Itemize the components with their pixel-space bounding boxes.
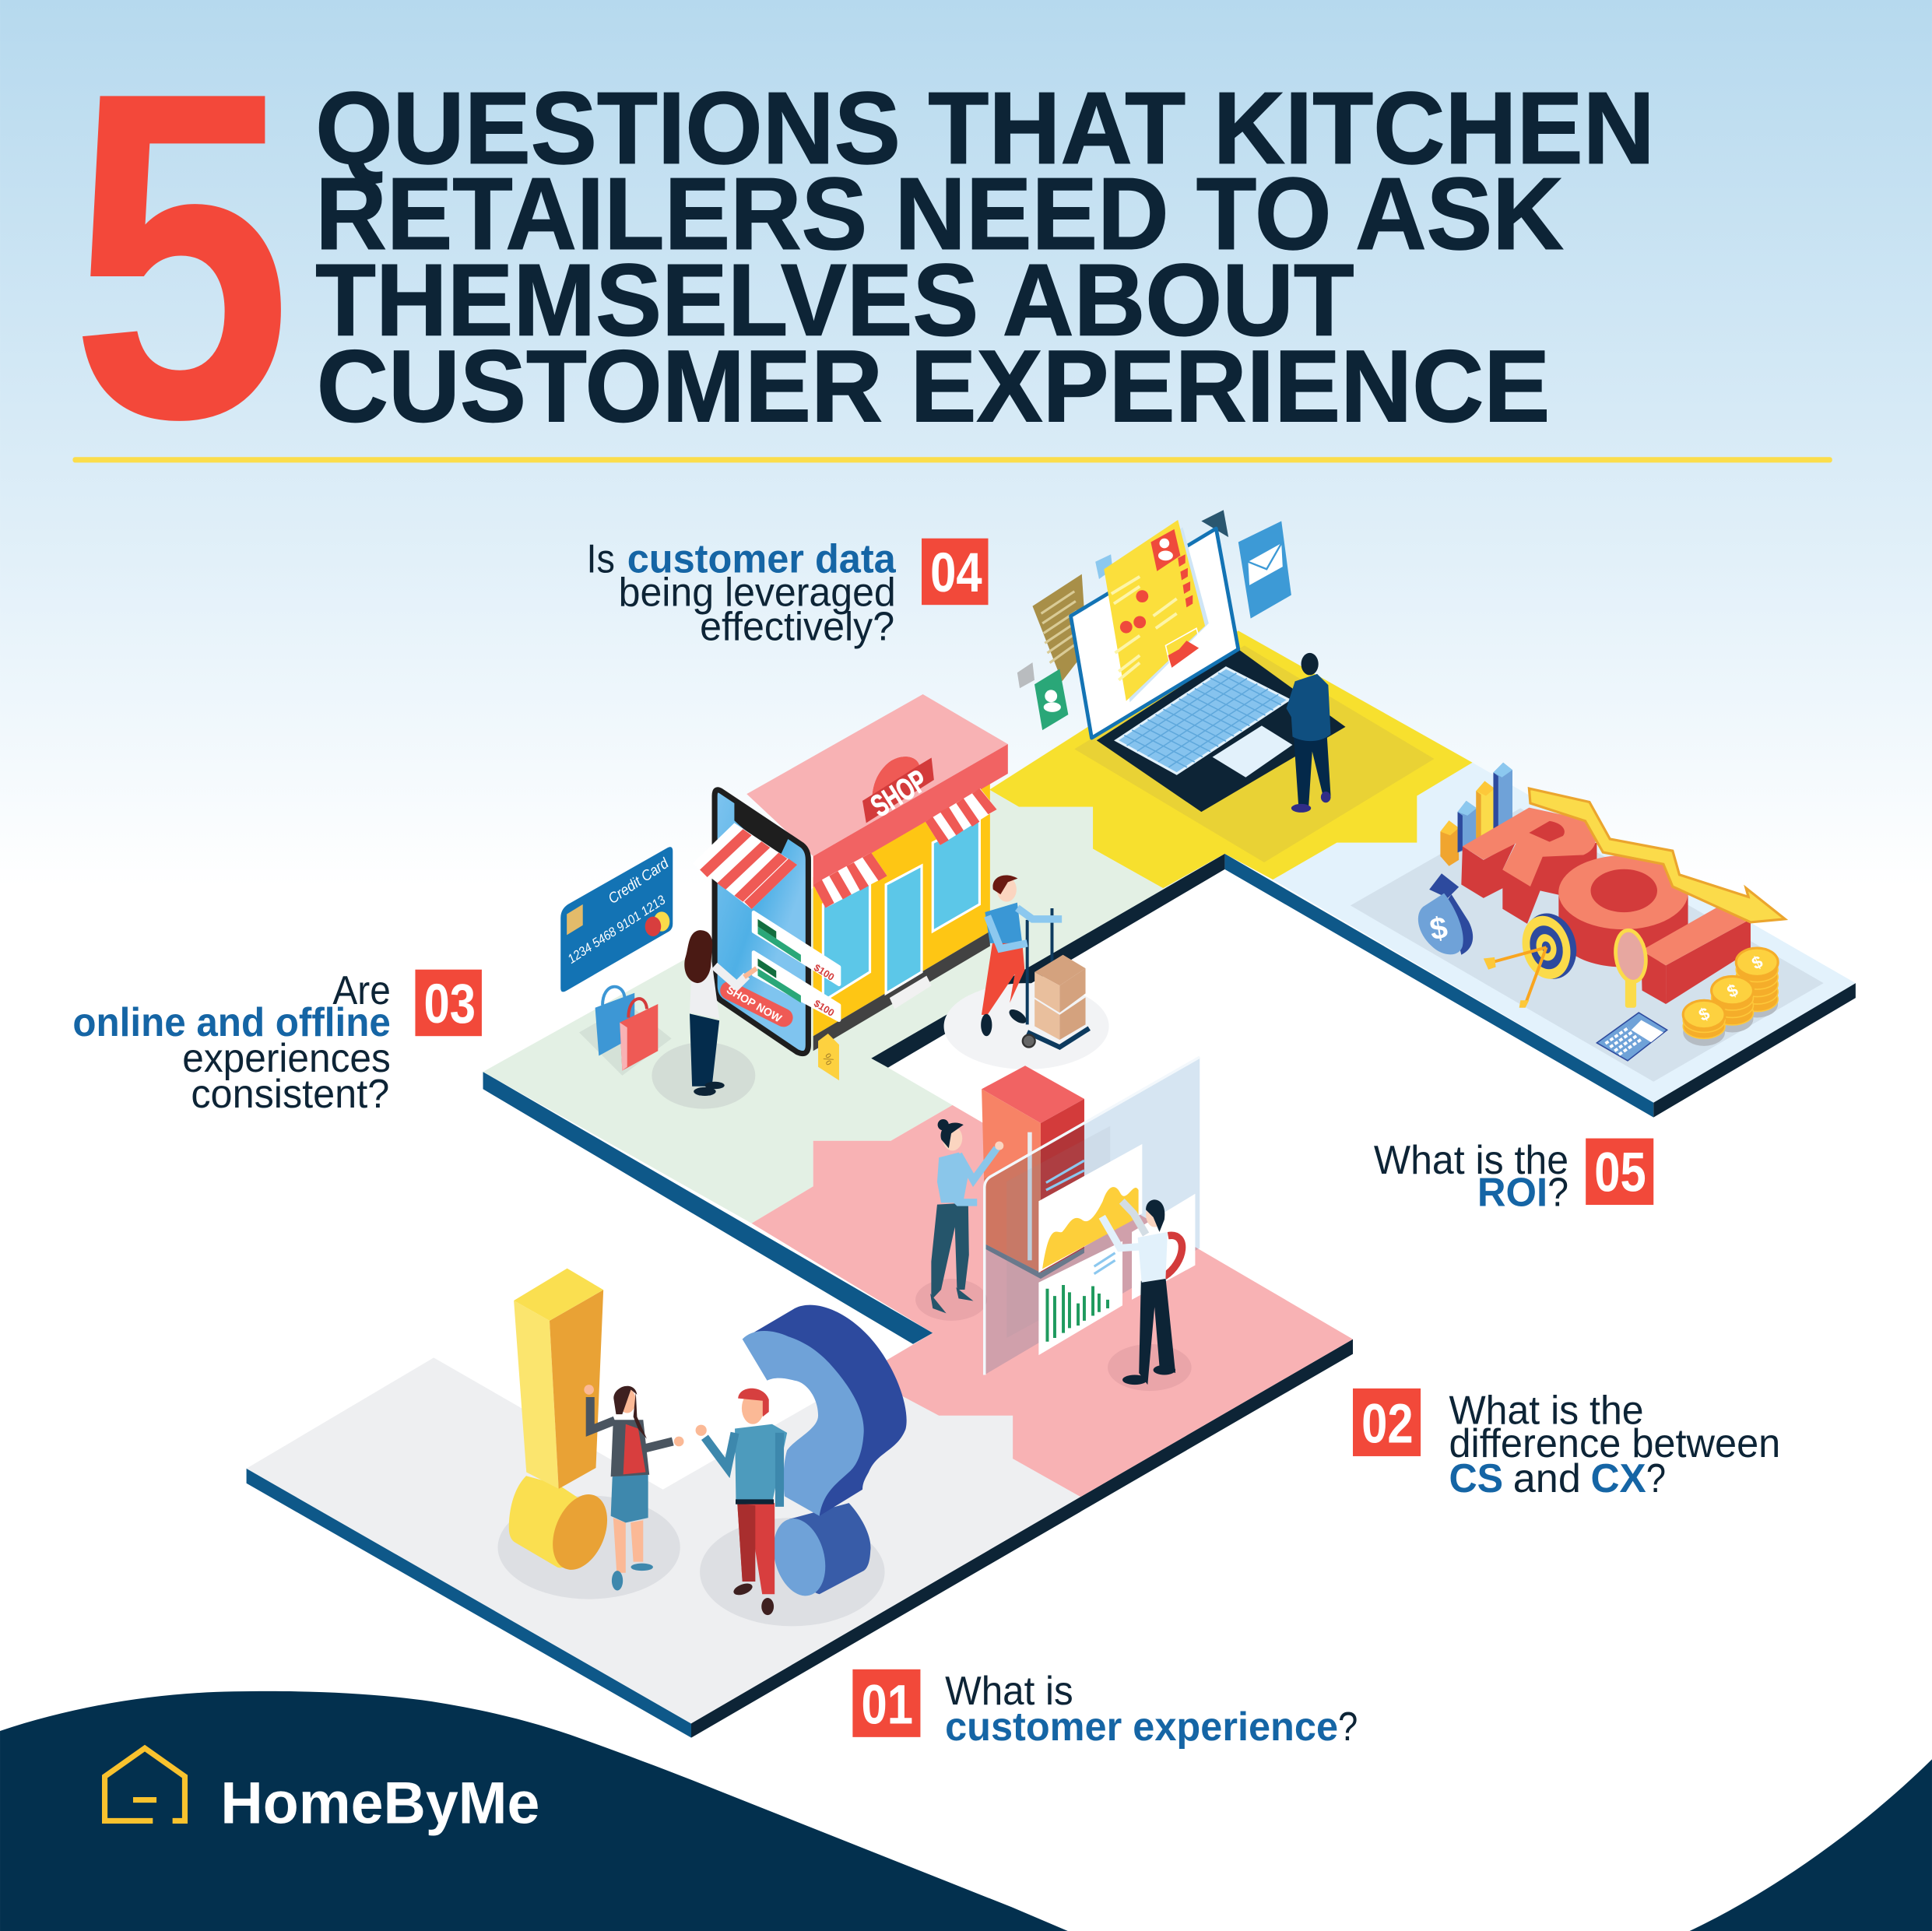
ROI letters [1461, 808, 1751, 1004]
icon: refrigerator [982, 1066, 1084, 1279]
awnings [813, 788, 997, 908]
person: man at laptop [1287, 653, 1331, 813]
question 05 [1374, 1138, 1653, 1216]
title divider line [72, 457, 1832, 462]
question 03 [72, 968, 482, 1117]
question 01 [852, 1669, 1358, 1750]
icon: coin stacks [1683, 948, 1778, 1046]
question text 04: effectively? [700, 605, 894, 650]
icon: coin stacks: $ [1724, 980, 1741, 1002]
product cards: $100 [812, 998, 836, 1019]
question text 02: What is the [1449, 1388, 1644, 1433]
bar chart card [1038, 1241, 1122, 1355]
panel 01: customer experience platform [247, 1269, 1080, 1738]
big number 5: 5 [70, 0, 292, 515]
question text 02: CX [1591, 1456, 1646, 1501]
title [315, 71, 1655, 443]
question text 03: Are [332, 968, 391, 1013]
bar chart icon [1440, 763, 1512, 866]
icon: money bag: $ [1428, 911, 1450, 947]
panel 05: ROI platform [1224, 763, 1856, 1118]
shop now button: SHOP NOW [724, 984, 784, 1026]
person: man in red trousers [696, 1389, 787, 1615]
footer wave right [1688, 1759, 1932, 1931]
icon: coin stacks: $ [1749, 951, 1766, 974]
icon: shop [746, 694, 1008, 1051]
question text 05: ROI [1477, 1171, 1547, 1216]
icon: calculator [1597, 1013, 1667, 1061]
icon: shopping bags [579, 987, 672, 1076]
question text 01: ? [1338, 1705, 1358, 1750]
number badge 03: 03 [424, 974, 476, 1035]
person: man in white shirt [1102, 1199, 1175, 1385]
brand name: HomeByMe [220, 1771, 539, 1837]
question text 03 [72, 968, 391, 1117]
icon: credit card: 1234 5468 9101 1213 [565, 892, 669, 967]
title: CUSTOMER EXPERIENCE [317, 328, 1550, 443]
person: woman in blue [930, 1119, 1003, 1313]
icon: credit card: Credit Card [606, 855, 673, 908]
shadow ellipses [915, 1279, 987, 1321]
number badge 04: 04 [930, 542, 982, 604]
question 02 [1353, 1388, 1780, 1501]
product cards: $100 [812, 962, 836, 983]
question text 03: experiences [182, 1036, 391, 1081]
footer wave left [0, 1691, 1070, 1931]
glass panel [985, 1057, 1200, 1375]
question text 05 [1374, 1138, 1568, 1216]
icon: floating documents [1017, 510, 1291, 730]
question text 02: CS [1449, 1456, 1503, 1501]
product cards [753, 912, 839, 1020]
person: shopper [684, 930, 757, 1096]
shop sign [862, 757, 934, 823]
question text 05: What is the [1374, 1138, 1568, 1183]
panel 04: customer data platform [871, 510, 1473, 1068]
number badge 02: 02 [1361, 1394, 1414, 1455]
question text 02: ? [1646, 1456, 1666, 1501]
icon: price tag: % [820, 1052, 836, 1068]
logo [105, 1748, 539, 1837]
question text 04 [586, 537, 897, 650]
question text 05: ? [1547, 1171, 1568, 1216]
question text 04: Is [586, 537, 615, 582]
icon: price tag [818, 1034, 839, 1080]
person: woman with jacket [584, 1385, 684, 1590]
icon: laptop [1071, 520, 1346, 812]
person: courier with hand truck [981, 875, 1089, 1047]
question text 02: and [1513, 1456, 1581, 1501]
phone awning [693, 823, 797, 909]
icon: house [105, 1748, 184, 1820]
question text 03: consistent? [191, 1072, 389, 1117]
panel 03: online and offline platform [483, 694, 1224, 1344]
title: QUESTIONS THAT KITCHEN [315, 71, 1655, 185]
icon: money bag [1418, 873, 1473, 955]
shadow ellipse under courier [944, 983, 1109, 1069]
question text 04: customer data [627, 537, 897, 582]
question text 01: What is [945, 1669, 1073, 1714]
number badge 01: 01 [861, 1674, 913, 1736]
panel 02: CS vs CX platform [691, 1057, 1353, 1737]
icon: coin stacks: $ [1695, 1003, 1713, 1025]
question 04 [586, 537, 988, 650]
icon: question mark [743, 1305, 907, 1602]
line chart card [1038, 1144, 1142, 1273]
icon: smartphone [693, 790, 839, 1054]
title: THEMSELVES ABOUT [315, 243, 1354, 357]
icon: exclamation mark [509, 1269, 617, 1578]
icon: falling arrow [1529, 788, 1785, 922]
question text 02 [1449, 1388, 1780, 1501]
shadow ellipses [498, 1496, 680, 1599]
shop sign: SHOP [865, 764, 933, 823]
question text 01: customer experience [945, 1705, 1338, 1750]
question text 03: online and offline [72, 1000, 391, 1045]
question text 01 [945, 1669, 1358, 1750]
shadow ellipse under shopper [652, 1042, 755, 1109]
icon: target with arrows [1484, 908, 1583, 1008]
question text 04: being leveraged [619, 570, 896, 615]
question text 02: difference between [1449, 1421, 1780, 1466]
back card with donut [1132, 1194, 1195, 1300]
number badge 05: 05 [1594, 1143, 1646, 1204]
icon: credit card [560, 847, 673, 992]
icon: magnifier [1613, 929, 1649, 1008]
title: RETAILERS NEED TO ASK [315, 156, 1564, 271]
